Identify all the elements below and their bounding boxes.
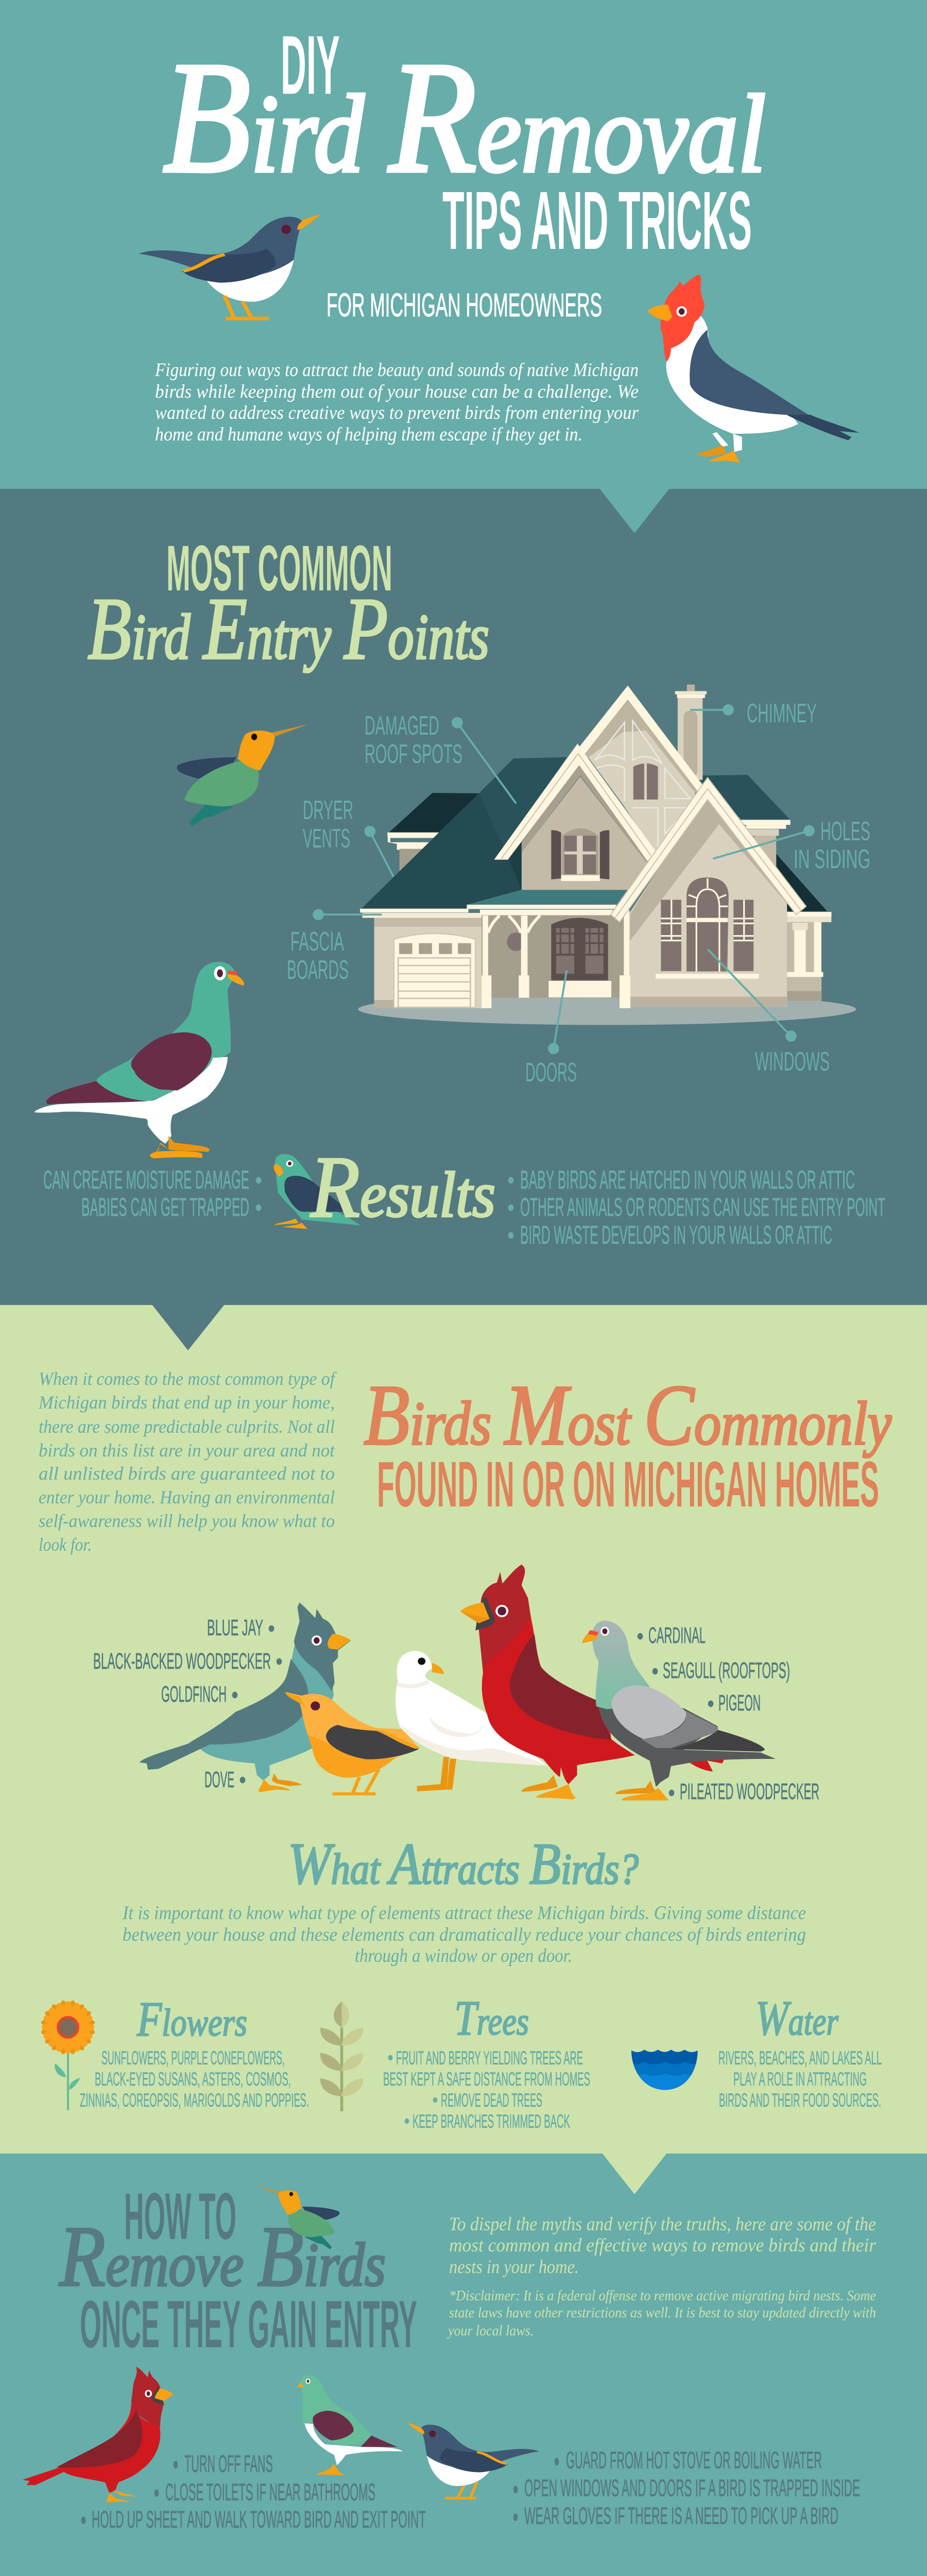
- panel: entry points background: [0, 489, 927, 1305]
- paragraph: removal intro: nests in your home.: [449, 2257, 579, 2278]
- paragraph: removal intro: [449, 2214, 877, 2278]
- icon: pigeon: [582, 1621, 776, 1801]
- house labels: DOORS: [525, 1058, 577, 1088]
- intro paragraph: Figuring out ways to attract the beauty and sounds of native Michigan: [154, 360, 639, 381]
- text: trees: REMOVE DEAD TREES: [441, 2090, 542, 2111]
- house labels: HOLES: [820, 817, 870, 846]
- paragraph: removal intro: most common and effective ways to remove birds and their: [449, 2235, 877, 2256]
- intro paragraph: [154, 360, 639, 445]
- heading: remove birds: Remove Birds: [59, 2209, 386, 2304]
- text: HOW TO: [124, 2180, 236, 2253]
- text: flowers: [80, 2047, 309, 2111]
- heading: results: Results: [310, 1139, 495, 1235]
- house labels: IN SIDING: [794, 844, 870, 874]
- panel: common birds background: [0, 1305, 927, 2154]
- text: trees: [383, 2047, 590, 2132]
- leader lines and dots: [314, 705, 814, 1053]
- text: left results list: [43, 1165, 261, 1222]
- paragraph: what attracts birds: [122, 1903, 806, 1967]
- paragraph: common birds: Michigan birds that end up in your home,: [38, 1392, 335, 1413]
- bird name labels: CARDINAL: [648, 1623, 706, 1648]
- panel: removal background: [0, 2154, 927, 2576]
- paragraph: common birds: [38, 1368, 337, 1555]
- paragraph: what attracts birds: through a window or open door.: [355, 1945, 572, 1967]
- heading: birds most commonly: Birds Most Commonly: [364, 1367, 892, 1463]
- intro paragraph: wanted to address creative ways to prevent birds from entering your: [155, 402, 639, 423]
- heading: water: Water: [756, 1991, 839, 2045]
- arrow: entry points pointer: [152, 1304, 225, 1350]
- text: trees: FRUIT AND BERRY YIELDING TREES ARE: [396, 2047, 583, 2069]
- text: trees: KEEP BRANCHES TRIMMED BACK: [413, 2111, 570, 2132]
- paragraph: what attracts birds: between your house and these elements can dramatically reduce your chances of birds entering: [123, 1924, 806, 1945]
- icon: branch: [320, 2002, 363, 2111]
- text: left results list: BABIES CAN GET TRAPPED: [81, 1193, 249, 1222]
- paragraph: common birds: birds on this list are in your area and not: [39, 1440, 335, 1461]
- illustration: house: [358, 685, 856, 1025]
- title: Bird Removal: Bird Removal: [163, 29, 766, 206]
- house labels: ROOF SPOTS: [365, 739, 462, 769]
- intro paragraph: birds while keeping them out of your house can be a challenge. We: [155, 381, 639, 402]
- text: left removal tips: TURN OFF FANS: [184, 2450, 273, 2477]
- icon: white dove: [396, 1651, 547, 1791]
- text: MOST COMMON: [166, 533, 392, 604]
- heading: what attracts birds: What Attracts Birds?: [288, 1831, 639, 1896]
- icon: sunflower: [41, 2000, 95, 2110]
- text: right results list: [508, 1165, 885, 1249]
- paragraph: common birds: enter your home. Having an environmental: [39, 1487, 335, 1507]
- text: water: [718, 2047, 882, 2111]
- paragraph: common birds: self-awareness will help you know what to: [39, 1511, 335, 1531]
- paragraph: common birds: When it comes to the most common type of: [39, 1368, 337, 1389]
- bird name labels: DOVE: [204, 1767, 234, 1792]
- icon: cardinal facing right: [23, 2367, 173, 2502]
- paragraph: disclaimer: your local laws.: [447, 2323, 534, 2339]
- text: ZINNIAS, COREOPSIS, MARIGOLDS AND POPPIES.: [80, 2090, 309, 2111]
- house labels: DAMAGED: [365, 711, 439, 741]
- bird name labels: BLUE JAY: [207, 1615, 263, 1640]
- text: flowers: BLACK-EYED SUSANS, ASTERS, COSMOS,: [95, 2069, 291, 2090]
- arrow: common birds pointer: [602, 2153, 667, 2194]
- paragraph: disclaimer: *Disclaimer: It is a federal offense to remove active migrating bird nests. Some: [449, 2288, 876, 2304]
- text: left results list: CAN CREATE MOISTURE DAMAGE: [43, 1165, 249, 1194]
- icon: cardinal: [460, 1565, 725, 1800]
- icon: blue jay: [140, 1603, 351, 1792]
- house labels: DRYER: [303, 795, 353, 825]
- text: ONCE THEY GAIN ENTRY: [80, 2286, 417, 2362]
- title: [163, 19, 766, 324]
- paragraph: common birds: look for.: [39, 1534, 92, 1555]
- arrow: intro pointer: [599, 488, 670, 533]
- house labels: FASCIA: [290, 927, 344, 957]
- heading: trees: Trees: [454, 1991, 529, 2045]
- bird name labels: GOLDFINCH: [161, 1682, 227, 1707]
- text: HOLD UP SHEET AND WALK TOWARD BIRD AND EXIT POINT: [92, 2506, 426, 2533]
- text: trees: BEST KEPT A SAFE DISTANCE FROM HOMES: [383, 2069, 590, 2090]
- icon: hummingbird: [177, 724, 308, 826]
- heading: bird entry points: Bird Entry Points: [88, 580, 489, 678]
- bird name labels: BLACK-BACKED WOODPECKER: [93, 1649, 271, 1674]
- paragraph: common birds: there are some predictable culprits. Not all: [39, 1416, 335, 1437]
- icon: blue songbird mirrored: [410, 2424, 539, 2500]
- icon: water: [631, 2049, 698, 2090]
- intro paragraph: home and humane ways of helping them escape if they get in.: [155, 424, 582, 445]
- subtitle: FOR MICHIGAN HOMEOWNERS: [327, 286, 602, 324]
- house labels: BOARDS: [287, 955, 349, 985]
- house labels: [287, 699, 870, 1088]
- icon: red crested cardinal: [647, 275, 859, 463]
- icon: hummingbird mirrored: [257, 2186, 339, 2249]
- bird name labels: SEAGULL (ROOFTOPS): [663, 1658, 790, 1683]
- icon: green pigeon: [35, 962, 244, 1159]
- text: right removal tips: [513, 2447, 860, 2529]
- paragraph: removal intro: To dispel the myths and verify the truths, here are some of the: [449, 2214, 876, 2235]
- paragraph: disclaimer: state laws have other restrictions as well. It is best to stay updated directly with: [449, 2305, 876, 2321]
- paragraph: disclaimer: [447, 2288, 876, 2339]
- icon: green pigeon small: [297, 2375, 403, 2475]
- house labels: WINDOWS: [755, 1047, 830, 1077]
- icon: blue songbird: [139, 216, 317, 320]
- paragraph: what attracts birds: It is important to know what type of elements attract these Michigan birds. Giving some distance: [122, 1903, 806, 1924]
- paragraph: common birds: all unlisted birds are guaranteed not to: [39, 1463, 335, 1484]
- house labels: VENTS: [303, 824, 350, 854]
- heading: flowers: Flowers: [136, 1992, 247, 2046]
- house labels: CHIMNEY: [747, 699, 817, 728]
- text: left removal tips: [81, 2450, 426, 2533]
- title: DIY: [281, 19, 340, 112]
- icon: goldfinch: [285, 1692, 420, 1795]
- icon: results parrot: [273, 1154, 360, 1229]
- text: flowers: SUNFLOWERS, PURPLE CONEFLOWERS,: [101, 2047, 285, 2069]
- bird name labels: PIGEON: [718, 1690, 761, 1716]
- text: left removal tips: CLOSE TOILETS IF NEAR BATHROOMS: [165, 2479, 375, 2505]
- bird name labels: [93, 1615, 819, 1804]
- panel: intro background: [0, 0, 927, 489]
